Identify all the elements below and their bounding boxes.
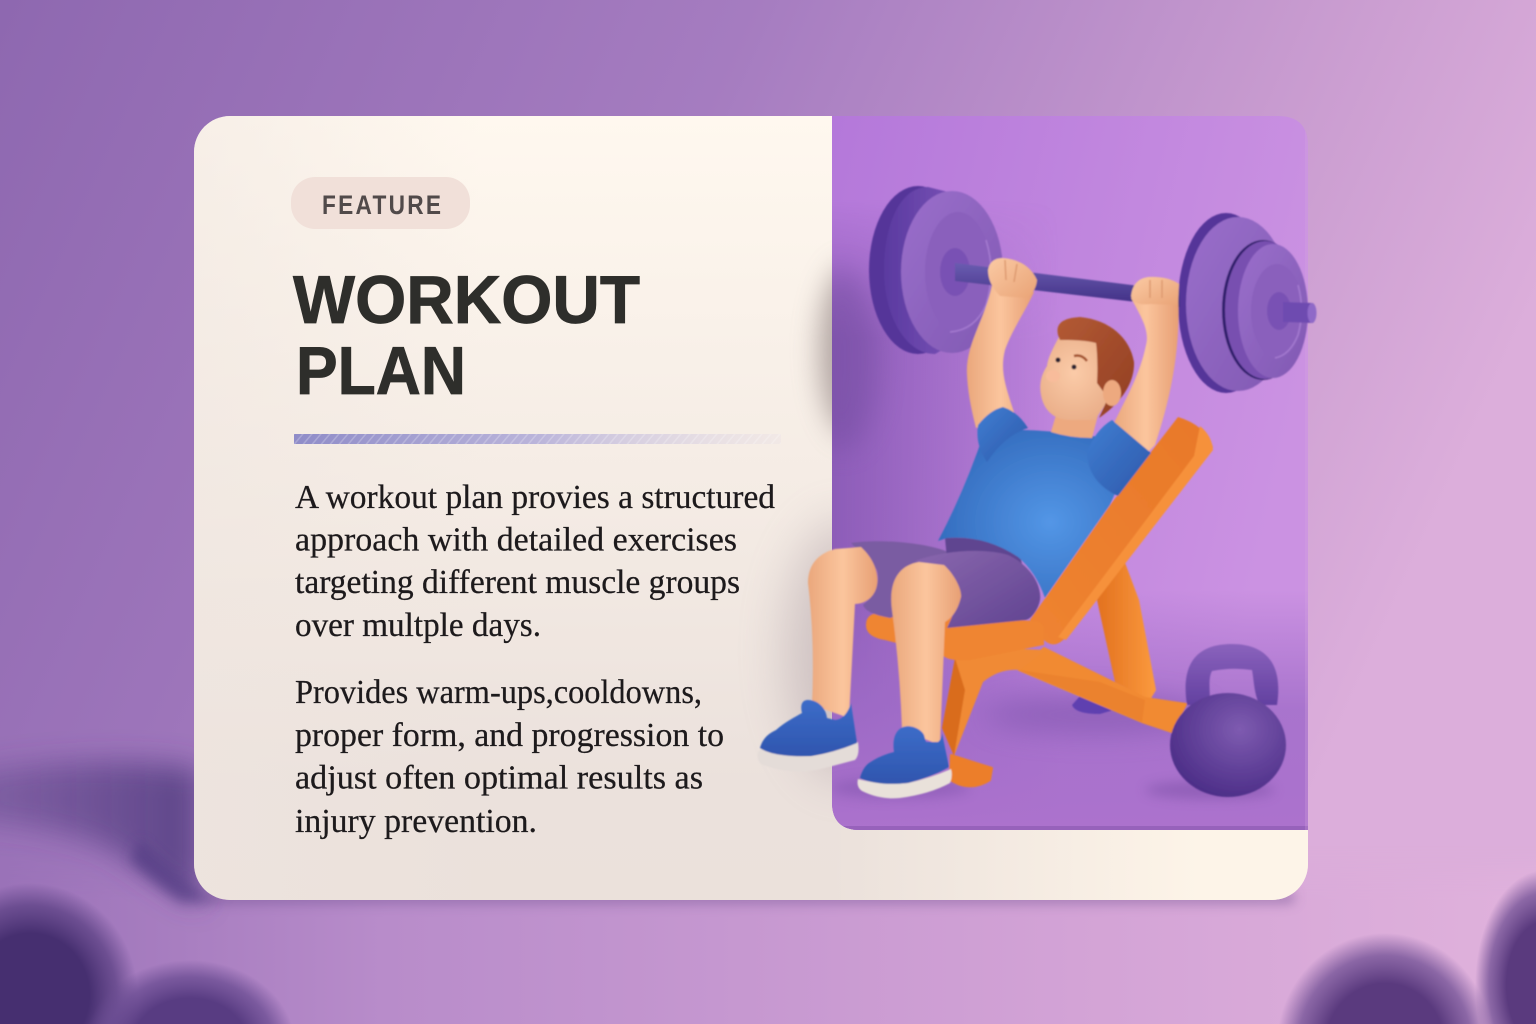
title: WORKOUT — [293, 262, 640, 338]
text block: description 1: over multple days. — [295, 607, 541, 644]
badge: FEATURE — [291, 177, 470, 229]
badge: FEATURE: FEATURE — [322, 190, 441, 220]
text block: description 1: A workout plan provies a structured — [295, 479, 775, 516]
divider rule — [294, 434, 781, 444]
text block: description 1 — [295, 479, 775, 644]
hands — [988, 258, 1179, 305]
left barbell plate — [869, 186, 1003, 354]
card — [194, 116, 1308, 900]
title — [293, 262, 640, 409]
text block: description 2: adjust often optimal results as — [295, 760, 703, 796]
legs — [808, 547, 961, 745]
title: PLAN — [296, 333, 466, 409]
text block: description 1: approach with detailed exercises — [295, 522, 737, 558]
text block: description 1: targeting different muscle groups — [295, 564, 740, 601]
barbell bar — [955, 263, 1316, 323]
background blurred weights — [0, 870, 1536, 1024]
illustration: man bench pressing — [758, 186, 1316, 798]
kettlebell — [1170, 644, 1286, 797]
arms — [967, 285, 1178, 460]
text block: description 2 — [295, 674, 724, 840]
bench legs — [942, 560, 1186, 786]
panel: illustration background — [806, 116, 1308, 830]
text block: description 2: Provides warm-ups,cooldowns, — [295, 674, 702, 711]
shoes — [758, 700, 952, 798]
text block: description 2: injury prevention. — [295, 803, 537, 840]
right barbell plate — [1178, 213, 1308, 393]
bench back and seat — [866, 417, 1213, 660]
head — [1040, 317, 1134, 438]
shorts — [851, 538, 1040, 628]
card shadow — [205, 892, 1295, 903]
torso — [938, 407, 1151, 598]
text block: description 2: proper form, and progression to — [295, 717, 724, 754]
